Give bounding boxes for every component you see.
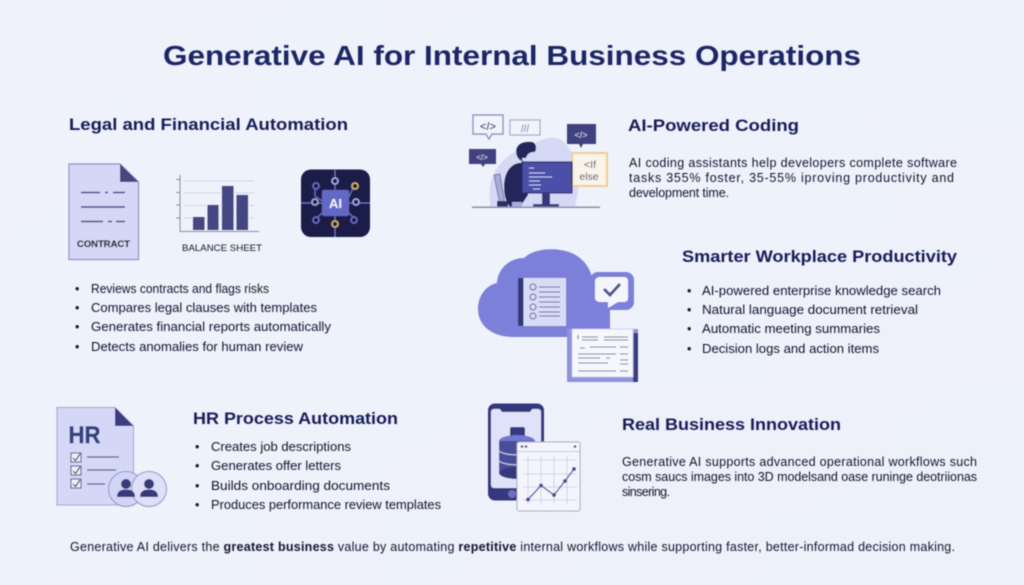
icon: AI chip: AI xyxy=(329,196,342,211)
bullet list: legal and financial: Generates financial reports automatically xyxy=(91,320,332,334)
illustration: developer at computer: </> xyxy=(574,130,588,140)
chart: balance sheet xyxy=(176,175,262,254)
illustration: developer at computer xyxy=(469,115,607,208)
icon: AI chip xyxy=(301,170,370,237)
bullet list: productivity: Natural language document retrieval xyxy=(702,303,918,317)
body text: AI coding xyxy=(629,156,957,200)
bullet list: HR: Produces performance review templates xyxy=(211,498,441,512)
bullet list: legal and financial xyxy=(75,282,332,354)
illustration: developer at computer: </> xyxy=(480,121,496,133)
bullet list: HR: • xyxy=(195,498,199,512)
heading: AI-powered coding: AI-Powered Coding xyxy=(628,116,799,135)
bullet list: HR: • xyxy=(195,459,199,473)
illustration: developer at computer: <If xyxy=(584,159,596,171)
body text: innovation: sinsering. xyxy=(622,485,670,499)
bullet list: legal and financial: • xyxy=(75,340,79,354)
heading: real business innovation: Real Business Innovation xyxy=(622,415,841,434)
bullet list: productivity: • xyxy=(687,342,691,356)
heading: HR process automation: HR Process Automation xyxy=(193,409,398,428)
title: Generative AI for Internal Business Operations xyxy=(163,40,861,71)
panel: smarter workplace productivity xyxy=(478,247,958,382)
icon: HR document with people xyxy=(57,408,166,506)
illustration: developer at computer: else xyxy=(579,171,599,183)
bullet list: legal and financial: Compares legal clauses with templates xyxy=(91,301,317,315)
bullet list: HR: Generates offer letters xyxy=(211,459,341,473)
body text: AI coding: development time. xyxy=(629,186,729,200)
chart: balance sheet: BALANCE SHEET xyxy=(182,243,262,254)
illustration: cloud with documents xyxy=(478,249,638,382)
bullet list: HR: • xyxy=(195,440,199,454)
panel: legal and financial automation xyxy=(69,115,370,354)
bullet list: legal and financial: • xyxy=(75,320,79,334)
body text: innovation: cosm saucs images into 3D modelsand oase runinge deotriionas xyxy=(622,470,977,484)
bullet list: HR xyxy=(195,440,441,512)
bullet list: productivity: • xyxy=(687,303,691,317)
bullet list: productivity: Decision logs and action items xyxy=(702,342,879,356)
bullet list: HR: • xyxy=(195,479,199,493)
icon: HR document with people: HR xyxy=(68,422,100,449)
footer statement: Generative AI delivers the greatest business value by automating repetitive internal workflows while supporting faster, better-informad decision making. xyxy=(70,540,955,554)
bullet list: legal and financial: Detects anomalies for human review xyxy=(91,340,304,354)
body text: innovation xyxy=(622,455,977,499)
body text: innovation: Generative AI supports advanced operational workflows such xyxy=(622,455,977,469)
icon: contract document xyxy=(69,164,138,260)
icon: contract document: CONTRACT xyxy=(77,239,130,250)
bullet list: productivity: • xyxy=(687,322,691,336)
bullet list: HR: Creates job descriptions xyxy=(211,440,351,454)
illustration: developer at computer: </> xyxy=(476,153,488,162)
heading: legal and financial: Legal and Financial Automation xyxy=(69,115,348,134)
bullet list: legal and financial: • xyxy=(75,301,79,315)
bullet list: legal and financial: Reviews contracts and flags risks xyxy=(91,282,269,296)
illustration: developer at computer: /// xyxy=(521,124,529,135)
bullet list: productivity xyxy=(687,284,941,356)
illustration: phone with database and chart xyxy=(488,404,580,511)
bullet list: productivity: AI-powered enterprise knowledge search xyxy=(702,284,941,298)
bullet list: productivity: • xyxy=(687,284,691,298)
bullet list: legal and financial: • xyxy=(75,282,79,296)
panel: real business innovation xyxy=(488,404,977,511)
panel: AI-powered coding xyxy=(469,115,957,208)
body text: AI coding: tasks 355% foster, 35-55% iproving productivity and xyxy=(629,171,954,185)
panel: HR process automation xyxy=(57,408,441,512)
bullet list: HR: Builds onboarding documents xyxy=(211,479,390,493)
heading: smarter workplace productivity: Smarter Workplace Productivity xyxy=(682,247,958,266)
bullet list: productivity: Automatic meeting summaries xyxy=(702,322,880,336)
body text: AI coding: AI coding assistants help developers complete software xyxy=(629,156,957,170)
